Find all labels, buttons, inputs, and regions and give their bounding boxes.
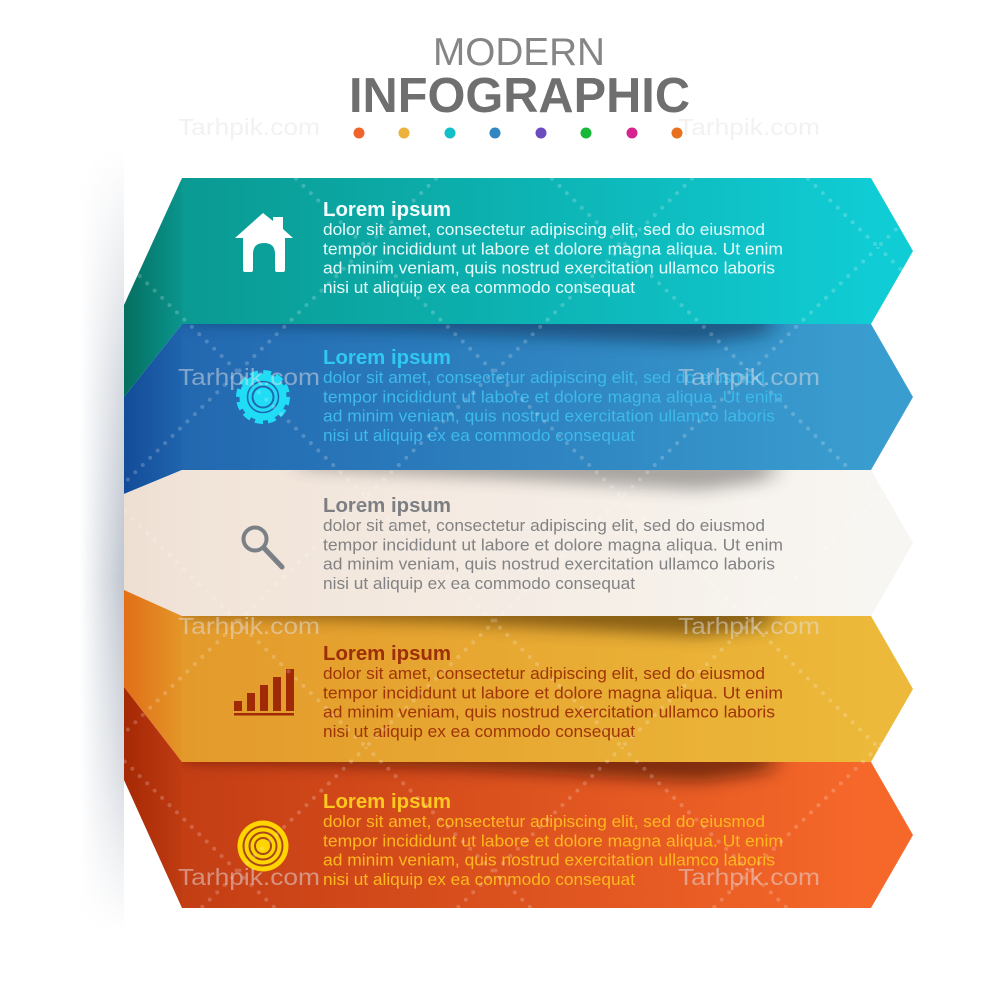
cream body text (323, 517, 783, 593)
blue body text: dolor sit amet, consectetur adipiscing elit, sed do eiusmod (323, 369, 765, 387)
cream side fold (124, 470, 182, 616)
blue body text: nisi ut aliquip ex ea commodo consequat (323, 427, 635, 445)
watermark dotted lattice (124, 178, 914, 908)
red body text: nisi ut aliquip ex ea commodo consequat (323, 871, 635, 889)
cream band shadow (293, 470, 786, 499)
teal heading: Lorem ipsum (323, 199, 451, 221)
teal body text: nisi ut aliquip ex ea commodo consequat (323, 279, 635, 297)
teal body text: dolor sit amet, consectetur adipiscing elit, sed do eiusmod (323, 221, 765, 239)
amber body text: ad minim veniam, quis nostrud exercitation ullamco laboris (323, 704, 775, 722)
red body text: ad minim veniam, quis nostrud exercitation ullamco laboris (323, 852, 775, 870)
watermark labels: Tarhpik.com (678, 364, 820, 390)
icon: magnifier (244, 528, 282, 567)
cream body text: tempor incididunt ut labore et dolore magna aliqua. Ut enim (323, 536, 783, 554)
watermark labels: Tarhpik.com (678, 613, 820, 639)
watermark labels (178, 114, 820, 890)
blue arrow band (182, 324, 913, 470)
red arrow band (182, 762, 913, 908)
watermark labels: Tarhpik.com (178, 364, 320, 390)
blue side fold (124, 324, 182, 494)
cream body text: nisi ut aliquip ex ea commodo consequat (323, 575, 635, 593)
watermark labels: Tarhpik.com (678, 114, 820, 140)
cream body text: dolor sit amet, consectetur adipiscing elit, sed do eiusmod (323, 517, 765, 535)
icon: target (238, 820, 288, 872)
amber body text (323, 665, 783, 741)
panel: amber band (124, 590, 913, 762)
icon: house (235, 213, 293, 272)
blue body text: tempor incididunt ut labore et dolore magna aliqua. Ut enim (323, 388, 783, 406)
amber band shadow (182, 602, 775, 636)
amber side fold (124, 590, 182, 762)
colour dots row (354, 128, 682, 138)
teal arrow band (182, 178, 913, 324)
amber body text: dolor sit amet, consectetur adipiscing elit, sed do eiusmod (323, 665, 765, 683)
blue body text (323, 369, 783, 445)
left wall shadow (86, 196, 124, 896)
watermark labels: Tarhpik.com (178, 864, 320, 890)
blue heading: Lorem ipsum (323, 347, 451, 369)
title line: infographic: INFOGRAPHIC (349, 69, 690, 123)
amber body text: tempor incididunt ut labore et dolore magna aliqua. Ut enim (323, 684, 783, 702)
cream arrow band (182, 470, 913, 616)
amber heading: Lorem ipsum (323, 643, 451, 665)
panel: blue band (124, 310, 913, 494)
panel: teal band (124, 178, 913, 397)
panel: red-orange band (124, 687, 913, 908)
red side fold (124, 687, 182, 908)
watermark labels: Tarhpik.com (178, 114, 320, 140)
title line: modern: MODERN (433, 31, 605, 74)
blue body text: ad minim veniam, quis nostrud exercitation ullamco laboris (323, 408, 775, 426)
teal body text (323, 221, 783, 297)
cream heading: Lorem ipsum (323, 495, 451, 517)
red heading: Lorem ipsum (323, 791, 451, 813)
icon: gear (238, 372, 288, 422)
red body text (323, 813, 783, 889)
panel: cream band (124, 456, 913, 616)
teal body text: ad minim veniam, quis nostrud exercitation ullamco laboris (323, 260, 775, 278)
icon: bar chart (234, 669, 294, 716)
teal body text: tempor incididunt ut labore et dolore magna aliqua. Ut enim (323, 240, 783, 258)
watermark labels: Tarhpik.com (178, 613, 320, 639)
amber body text: nisi ut aliquip ex ea commodo consequat (323, 723, 635, 741)
teal side fold (124, 178, 182, 397)
red body text: dolor sit amet, consectetur adipiscing elit, sed do eiusmod (323, 813, 765, 831)
blue band shadow (182, 324, 785, 353)
title (349, 31, 690, 123)
cream body text: ad minim veniam, quis nostrud exercitation ullamco laboris (323, 556, 775, 574)
red body text: tempor incididunt ut labore et dolore magna aliqua. Ut enim (323, 832, 783, 850)
watermark labels: Tarhpik.com (678, 864, 820, 890)
red band shadow (182, 748, 775, 782)
amber arrow band (182, 616, 913, 762)
